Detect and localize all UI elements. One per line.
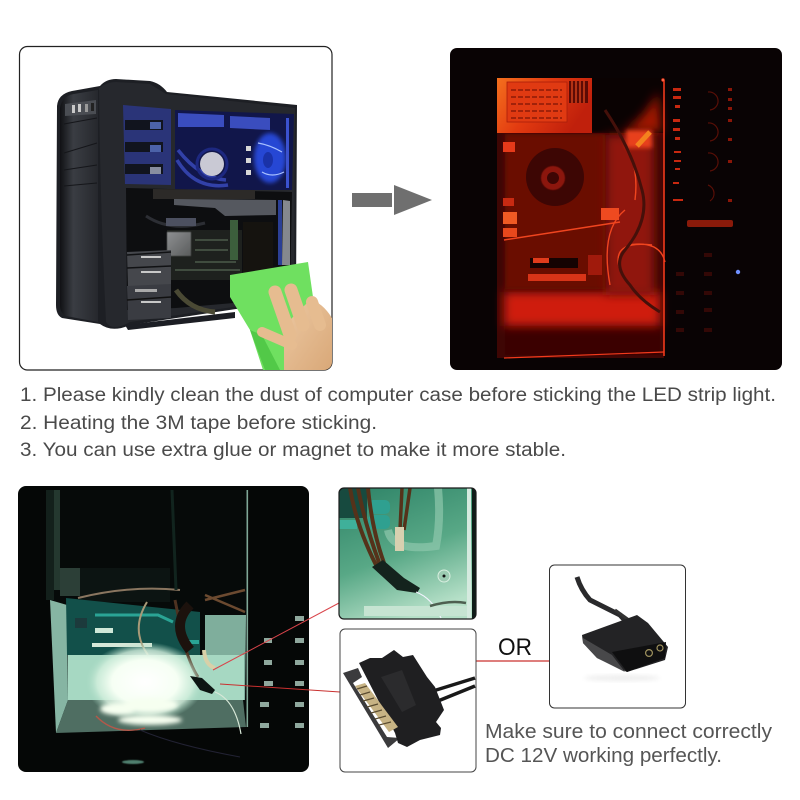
connection note: [485, 721, 772, 767]
instruction 1: 1. Please kindly clean the dust of computer case before sticking the LED strip light.: [20, 385, 776, 406]
red glow interior: [497, 78, 664, 358]
callout line: to inset photo: [213, 603, 339, 670]
panel: cleaning the computer case: [20, 46, 332, 370]
callout line: OR link: [475, 660, 550, 662]
motherboard details: [503, 110, 665, 312]
teal motherboard: [66, 598, 200, 655]
icon: green cloth: [230, 262, 320, 370]
CPU fan: [526, 148, 584, 206]
bottom reflection: [122, 760, 144, 764]
power supply: [497, 78, 592, 133]
glowing LED: [85, 642, 205, 730]
inset panel: SATA connector: [340, 629, 476, 772]
inset panel: Molex connector: [550, 565, 686, 708]
side vents: [260, 616, 304, 728]
callout line: to SATA connector: [220, 684, 340, 692]
note line 1: Make sure to connect correctly: [485, 721, 772, 743]
motherboard upper area: [175, 110, 294, 190]
OR label: OR: [498, 634, 532, 661]
graphics card and board: [126, 188, 292, 310]
instruction 3: 3. You can use extra glue or magnet to make it more stable.: [20, 440, 566, 461]
icon: hand: [262, 290, 332, 370]
inline connector: [140, 676, 241, 757]
arrow: from clean case to lit case: [352, 185, 432, 215]
icon: SATA connector: [343, 650, 475, 748]
dark upper board: [60, 490, 180, 602]
photo: case lit with red LED: [450, 48, 782, 370]
icon: computer tower: [56, 79, 297, 330]
case interior: [46, 490, 248, 733]
icon: Molex connector: [577, 577, 668, 681]
note line 2: DC 12V working perfectly.: [485, 745, 722, 767]
side panel vents: [673, 88, 740, 332]
numbered instructions: [20, 385, 776, 461]
drive bays: [127, 250, 171, 288]
wires bundle: [175, 590, 245, 677]
blue drive bay area: [123, 105, 171, 185]
red LED strip edges: [497, 76, 664, 360]
inset photo: inline connector close-up: [339, 488, 476, 619]
photo: case lit with white LED: [18, 486, 309, 772]
instruction 2: 2. Heating the 3M tape before sticking.: [20, 413, 377, 434]
